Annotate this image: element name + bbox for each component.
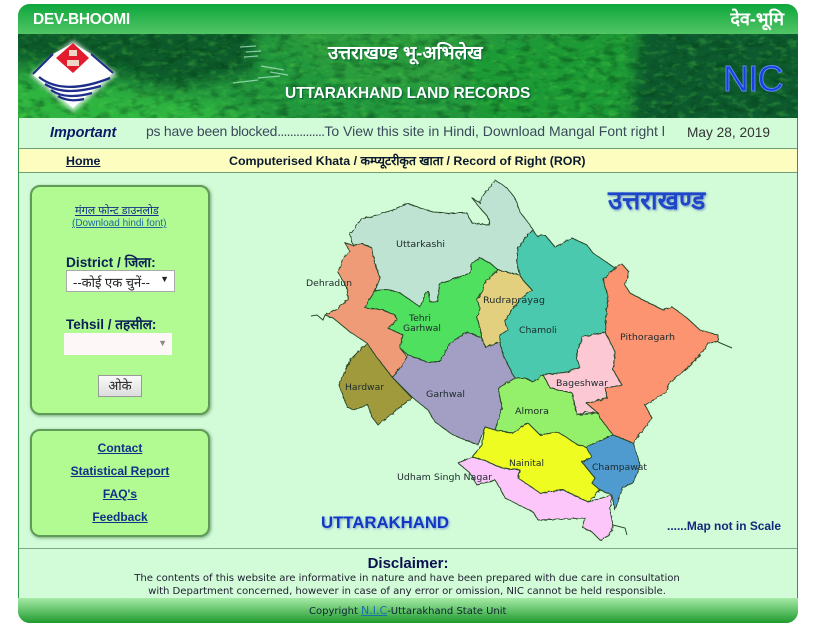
map labels: Uttarkashi	[396, 240, 445, 250]
map labels: Chamoli	[519, 326, 557, 336]
state emblem logo	[28, 38, 119, 114]
NIC logo: NIC	[723, 58, 783, 99]
header right title: देव-भूमि	[730, 9, 784, 29]
map labels: Nainital	[509, 459, 544, 469]
faq link: FAQ's	[103, 487, 137, 501]
home link: Home	[66, 154, 100, 168]
district: Garhwal	[392, 332, 515, 445]
banner English heading: UTTARAKHAND LAND RECORDS	[285, 85, 530, 102]
date: May 28, 2019	[687, 125, 770, 140]
district: Tehri Garhwal	[365, 258, 498, 362]
disclaimer text: The contents of this website are informative in nature and have been prepared with due care in consultation	[134, 573, 680, 584]
district: Udham Singh Nagar	[458, 457, 613, 540]
disclaimer text: with Department concerned, however in case of any error or omission, NIC cannot be held responsible.	[148, 586, 666, 596]
feedback link: Feedback	[92, 510, 148, 524]
map title English: UTTARAKHAND	[322, 515, 450, 533]
district: Pithoragarh	[586, 264, 718, 443]
map title English: UTTARAKHAND	[321, 514, 449, 532]
district: Bageshwar	[543, 332, 622, 415]
banner landscape	[18, 34, 798, 118]
tehsil select	[64, 333, 172, 355]
copyright: Copyright N.I.C-Uttarakhand State Unit	[309, 604, 506, 617]
tehsil label: Tehsil / तहसील:	[66, 317, 156, 332]
scale note: ......Map not in Scale	[667, 519, 781, 533]
disclaimer text	[134, 573, 680, 596]
district select: ▼	[160, 274, 169, 284]
map labels: Hardwar	[345, 383, 385, 393]
river	[233, 46, 288, 83]
ok button	[98, 375, 142, 397]
banner Hindi heading: उत्तराखण्ड भू-अभिलेख	[328, 42, 483, 63]
banner	[18, 34, 798, 118]
page title: Computerised Khata / कम्प्यूटरीकृत खाता / Record of Right (ROR)	[229, 154, 586, 168]
map labels: Almora	[515, 407, 549, 417]
district: Champawat	[582, 435, 640, 510]
map title Hindi: उत्तराखण्ड	[608, 186, 707, 216]
important label: Important	[50, 125, 116, 141]
map labels	[306, 240, 675, 483]
statistical report link: Statistical Report	[71, 464, 169, 478]
contact link: Contact	[98, 441, 142, 455]
font download link English: (Download hindi font)	[72, 218, 166, 229]
district: Hardwar	[339, 343, 412, 425]
district: Rudraprayag	[477, 270, 532, 347]
district: Dehradun	[325, 243, 407, 377]
river tails	[311, 315, 732, 535]
map labels: Bageshwar	[556, 379, 609, 389]
footer	[18, 598, 798, 623]
map labels: Udham Singh Nagar	[397, 473, 493, 483]
district label: District / जिला:	[66, 255, 156, 270]
map labels: Rudraprayag	[483, 296, 545, 306]
header left title: DEV-BHOOMI	[33, 11, 130, 28]
map of Uttarakhand	[306, 180, 781, 541]
district: Nainital	[472, 423, 600, 502]
marquee row	[19, 118, 797, 149]
navigation strip	[19, 149, 797, 173]
district: Chamoli	[500, 230, 615, 382]
header bar	[18, 4, 798, 34]
panel: district form	[30, 185, 210, 415]
map labels: Champawat	[592, 463, 648, 473]
panel: links	[30, 429, 210, 537]
tehsil select: ▼	[158, 338, 167, 348]
font download link: मंगल फोन्ट डाउनलोड	[75, 205, 159, 217]
district select	[66, 270, 175, 292]
disclaimer divider block	[19, 548, 797, 599]
map labels: Tehri	[408, 314, 431, 324]
map title Hindi: उत्तराखण्ड	[607, 185, 706, 215]
map labels: Garhwal	[403, 324, 441, 334]
map labels: Dehradun	[306, 279, 352, 289]
district: Almora	[495, 375, 613, 447]
district select: --कोई एक चुनें--	[73, 275, 150, 290]
disclaimer heading: Disclaimer:	[368, 555, 448, 572]
ok button: ओके	[108, 378, 132, 393]
map labels: Pithoragarh	[620, 333, 675, 343]
map labels: Garhwal	[426, 390, 465, 400]
district: Uttarkashi	[350, 180, 533, 307]
